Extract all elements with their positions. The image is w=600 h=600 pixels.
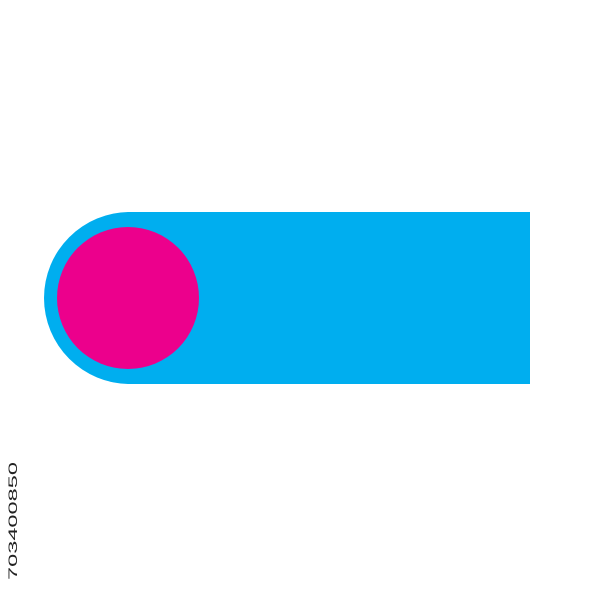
blue bar — [44, 212, 530, 384]
pink circle — [57, 227, 199, 369]
vertical stock id text: 703400850 — [6, 461, 20, 580]
